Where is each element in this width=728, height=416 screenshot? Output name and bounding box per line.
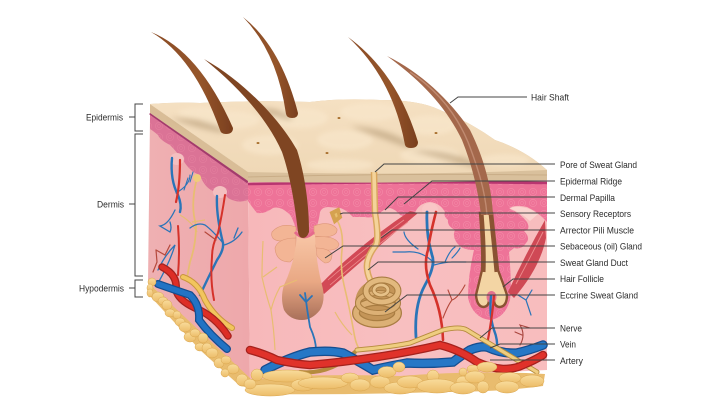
fat layer bottom (245, 362, 545, 396)
right labels: Arrector Pili Muscle (560, 226, 634, 236)
pores (256, 117, 438, 154)
hair papilla (486, 291, 496, 303)
right labels: Hair Follicle (560, 274, 604, 285)
lower tan nerve (300, 352, 355, 372)
top skin surface (150, 99, 547, 183)
left face epidermis (150, 113, 248, 202)
bottom vessels (250, 328, 543, 372)
follicle sheath sides (482, 213, 496, 272)
eccrine sweat gland coil (355, 280, 399, 326)
nerve bottom (357, 328, 537, 372)
light dermal papillae (509, 207, 538, 221)
fat layer left edge (147, 278, 256, 389)
right labels: Sebaceous (oil) Gland (560, 242, 642, 252)
sebaceous gland and hair bulb (272, 224, 339, 320)
leader lines (325, 97, 555, 360)
left labels: Dermis (97, 200, 124, 210)
left face vessels (158, 267, 232, 349)
right labels: Sensory Receptors (560, 209, 631, 220)
right labels: Epidermal Ridge (560, 176, 622, 188)
left labels: Epidermis (86, 112, 123, 124)
right labels: Artery (560, 356, 583, 367)
left labels (79, 112, 124, 294)
left face tan edge (150, 104, 248, 181)
left labels: Hypodermis (79, 284, 124, 294)
magenta ridge line (248, 182, 547, 184)
hypodermis bracket (129, 280, 143, 297)
epidermis band with ridges (170, 153, 547, 320)
sweat gland duct (367, 172, 377, 288)
right labels: Hair Shaft (531, 92, 569, 104)
hair shadows on surface (170, 108, 482, 168)
skin surface mounds (178, 103, 530, 171)
right labels: Sweat Gland Duct (560, 258, 628, 269)
left face magenta line (150, 113, 248, 182)
blue veins in dermis (157, 158, 532, 350)
left side face of skin block (148, 104, 250, 385)
vein bottom (265, 345, 543, 370)
right labels: Pore of Sweat Gland (560, 160, 637, 171)
artery bottom (250, 345, 543, 369)
left artery (162, 267, 228, 336)
hair strands (151, 17, 493, 238)
arrector pili muscles (319, 211, 546, 298)
left vein (158, 284, 227, 349)
right labels: Eccrine Sweat Gland (560, 290, 638, 302)
right front face dermis (248, 170, 547, 385)
left brackets (129, 104, 143, 297)
right labels (531, 92, 642, 367)
right labels: Nerve (560, 324, 582, 334)
dermis bracket (129, 134, 143, 276)
band line on epidermis edge (248, 174, 547, 177)
skin block artwork (147, 17, 547, 396)
left nerve (183, 277, 232, 328)
hair follicle right (476, 213, 507, 307)
right labels: Vein (560, 340, 576, 350)
right labels: Dermal Papilla (560, 193, 616, 204)
sensory receptor and nerves (180, 174, 360, 350)
red arteries in dermis (153, 160, 530, 350)
epidermis bracket (129, 104, 143, 131)
